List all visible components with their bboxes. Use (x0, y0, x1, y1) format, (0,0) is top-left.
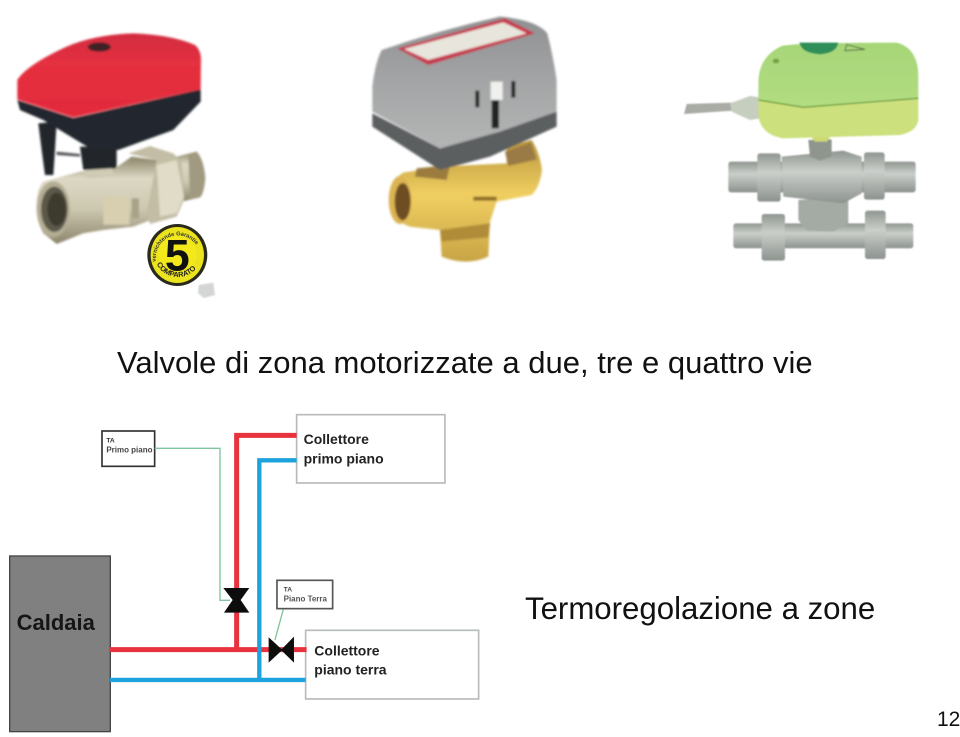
thermostat: ground floor: TA (284, 587, 292, 594)
thermostat: ground floor: Piano Terra (284, 595, 328, 604)
lower pipe (733, 223, 913, 248)
actuator lower (372, 112, 557, 170)
actuator red cover (17, 33, 201, 117)
caption: zone temperature control: Termoregolazione a zone (525, 591, 875, 626)
hot water pipes (110, 435, 307, 650)
actuator cover (372, 17, 557, 148)
threaded end (177, 152, 205, 202)
valve: first floor (223, 588, 249, 613)
watermark stamp (198, 283, 215, 298)
manifold: first floor: Collettore (304, 431, 369, 447)
cold water pipes (110, 460, 306, 680)
actuator lower (17, 89, 201, 150)
cable (684, 103, 733, 114)
manifold: first floor: primo piano (304, 450, 384, 466)
brass body (389, 140, 542, 262)
thermostat: ground floor (277, 580, 333, 609)
badge: five year warranty: COMPARATO (158, 262, 195, 278)
title: motorized zone valves: Valvole di zona motorizzate a due, tre e quattro vie (117, 345, 813, 380)
badge: five year warranty: vernichtende Garantie (152, 232, 198, 262)
valve body (37, 157, 160, 244)
badge: five year warranty (147, 224, 208, 286)
cable (38, 122, 57, 175)
manifold: first floor (297, 415, 445, 483)
diagram: zone heating schematic (10, 415, 479, 732)
manifold: ground floor (306, 630, 479, 699)
thermostat: first floor (102, 431, 155, 466)
boiler: Caldaia (17, 610, 96, 635)
photo: green motorized four-way valve (684, 43, 918, 261)
boiler (10, 556, 110, 732)
photo: red motorized two-way valve (16, 32, 216, 298)
actuator (758, 97, 918, 138)
photo: grey motorized three-way valve (372, 17, 557, 262)
union nut (128, 146, 184, 224)
control wires (155, 448, 283, 640)
valve: ground floor (269, 637, 294, 663)
label (397, 18, 535, 65)
manifold: ground floor: piano terra (314, 662, 387, 678)
manifold: ground floor: Collettore (314, 642, 380, 658)
thermostat: first floor: TA (106, 437, 115, 444)
end opening (37, 181, 70, 237)
upper pipe (728, 162, 916, 192)
thermostat: first floor: Primo piano (106, 445, 153, 454)
stem (85, 168, 115, 178)
page number: 12 (937, 708, 960, 731)
badge: five year warranty: 5 (165, 232, 190, 281)
